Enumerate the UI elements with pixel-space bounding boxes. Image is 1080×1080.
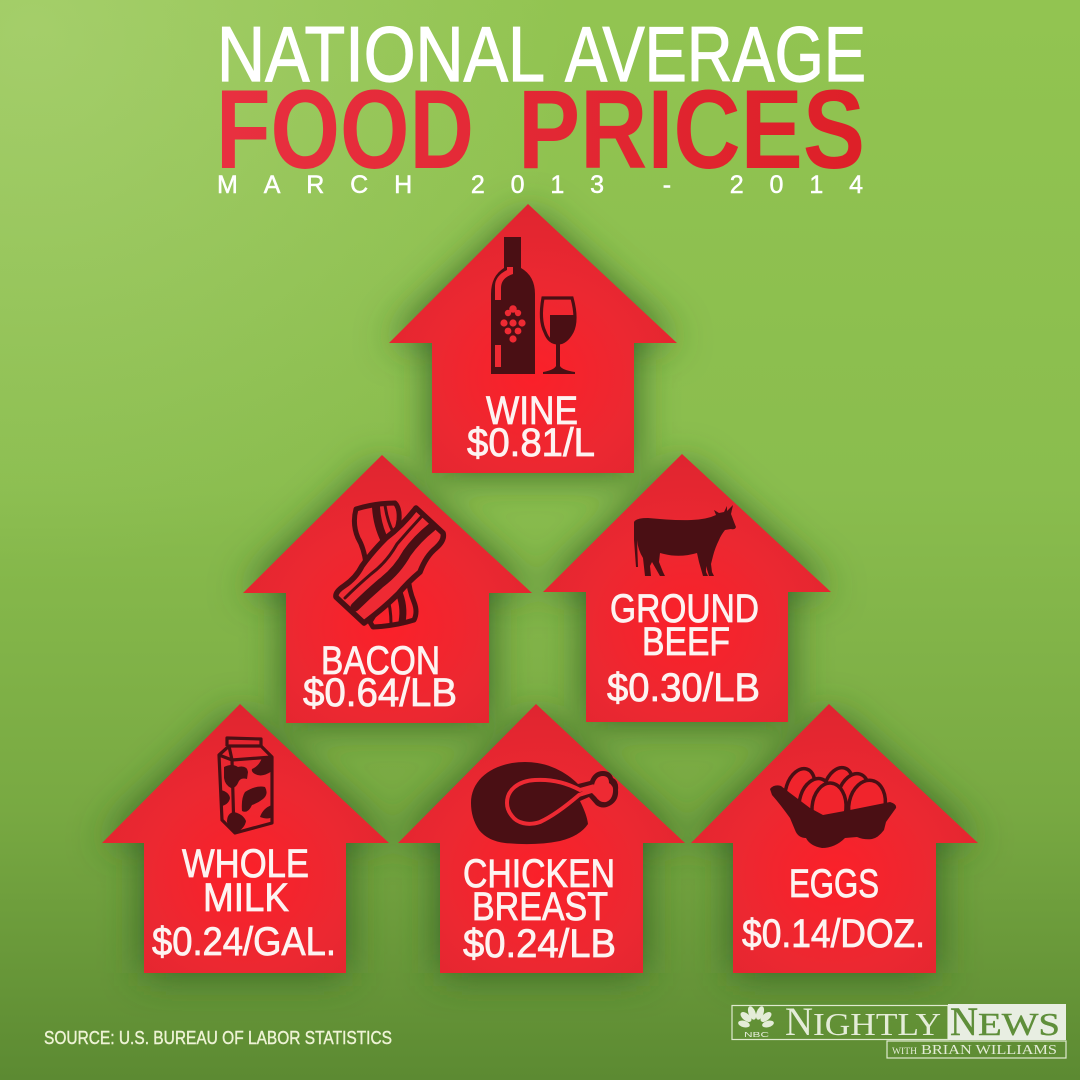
panel: ground beef [543, 454, 831, 722]
label: wine: WINE [486, 389, 578, 433]
title: food prices: FOOD [216, 67, 474, 192]
logo: nightly wordmark: N [785, 999, 813, 1044]
logo: news box [948, 1004, 1066, 1040]
arrow: eggs [691, 704, 978, 973]
panel: wine [389, 204, 677, 473]
label: whole: WHOLE [182, 842, 309, 886]
panel: whole milk [102, 704, 389, 973]
icon: chicken leg [471, 762, 618, 844]
source note: SOURCE: U.S. BUREAU OF LABOR STATISTICS [44, 1028, 392, 1048]
logo: with: WITH [892, 1046, 918, 1056]
icon: egg carton [770, 764, 896, 848]
arrow: chicken breast [398, 704, 685, 973]
title: national average: NATIONAL [217, 10, 545, 98]
arrow shadows [102, 212, 978, 973]
panel: chicken breast [398, 704, 685, 973]
label: chicken: CHICKEN [463, 852, 615, 896]
label: breast: BREAST [472, 885, 608, 929]
label: eggs: EGGS [789, 862, 879, 906]
price: whole milk: $0.24/GAL. [152, 920, 336, 964]
arrow: whole milk [102, 704, 389, 973]
label: beef: BEEF [642, 620, 730, 664]
label: bacon: BACON [321, 639, 440, 683]
icon: bacon strips [336, 503, 443, 627]
icon: nbc peacock: NBC [744, 1032, 769, 1039]
arrow: bacon [243, 455, 532, 723]
arrow: ground beef [543, 454, 831, 722]
logo: nbc nightly news [732, 999, 1066, 1058]
icon: nbc peacock [737, 1005, 775, 1039]
logo: nightly box [732, 1006, 948, 1040]
label: milk: MILK [203, 876, 289, 920]
label: ground: GROUND [610, 587, 759, 631]
logo: news wordmark: N [950, 999, 978, 1044]
price: ground beef: $0.30/LB [607, 666, 760, 710]
arrow: wine [389, 204, 677, 473]
logo: nightly wordmark rest: IGHTLY [813, 1006, 941, 1042]
panel: bacon [243, 455, 532, 723]
logo: anchor box [887, 1041, 1066, 1058]
subtitle: date range: MARCH 2013 - 2014 [217, 171, 863, 199]
icon: cow [634, 505, 736, 576]
panel: eggs [691, 704, 978, 973]
icon: wine bottle and glass [491, 237, 575, 374]
price: chicken breast: $0.24/LB [463, 922, 616, 966]
icon: milk carton [219, 738, 272, 833]
price: eggs: $0.14/DOZ. [742, 912, 925, 956]
logo: news wordmark rest: EWS [978, 1006, 1060, 1042]
title: national average [217, 10, 866, 98]
price: wine: $0.81/L [467, 421, 595, 465]
price: bacon: $0.64/LB [303, 671, 457, 715]
title: food prices: PRICES [518, 67, 865, 192]
title: national average: AVERAGE [565, 10, 866, 98]
logo: brian williams: BRIAN WILLIAMS [921, 1043, 1057, 1058]
title: food prices [216, 67, 865, 192]
